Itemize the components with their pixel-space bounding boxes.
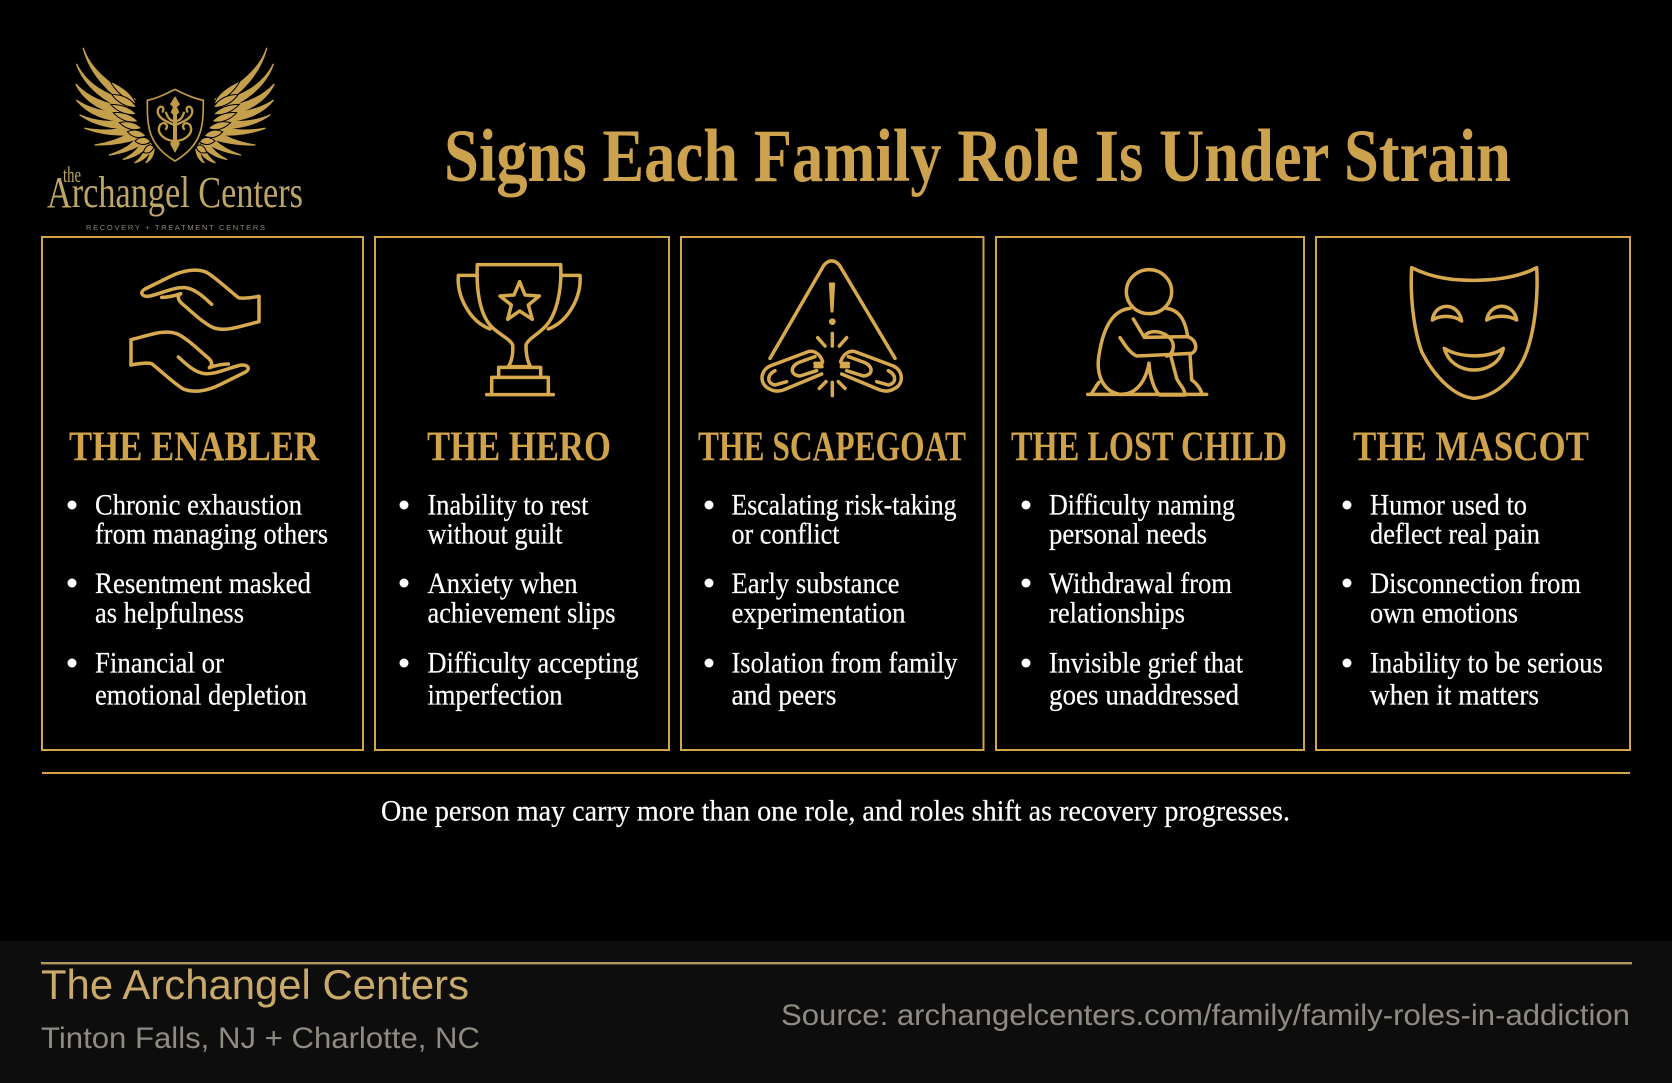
bullet list: as helpfulness [95, 598, 244, 630]
bullet list: experimentation [732, 598, 906, 630]
footer organisation name: The Archangel Centers [41, 961, 469, 1008]
bullet list: without guilt [428, 518, 563, 550]
logo wordmark: the [63, 162, 81, 187]
bullet list: own emotions [1370, 598, 1518, 630]
heading: THE HERO [427, 424, 611, 470]
bullet list: Difficulty naming [1049, 490, 1235, 522]
heading: THE MASCOT [1353, 424, 1589, 470]
bullet list: emotional depletion [95, 680, 307, 712]
bullet list: Financial or [95, 648, 224, 680]
logo: The Archangel Centers: Archangel Centers [47, 168, 303, 217]
icon: caring hands [131, 270, 259, 391]
bullet list [400, 490, 639, 712]
bullet list [1022, 490, 1244, 712]
icon: trophy [458, 265, 580, 395]
bullet list: Chronic exhaustion [95, 490, 302, 522]
bullet list: Difficulty accepting [428, 648, 639, 680]
heading: THE SCAPEGOAT [698, 424, 966, 470]
bullet list: relationships [1049, 598, 1185, 630]
heading: THE ENABLER [69, 424, 320, 470]
bullet list: Resentment masked [95, 568, 311, 600]
bullet list: Escalating risk-taking [732, 490, 957, 522]
bullet list [68, 490, 328, 712]
panel: The Scapegoat [681, 237, 984, 750]
bullet list [704, 490, 958, 712]
bullet list: Isolation from family [732, 648, 958, 680]
bullet list: and peers [732, 680, 836, 712]
bullet list: Invisible grief that [1049, 648, 1244, 680]
bullet list: from managing others [95, 518, 328, 550]
bullet list: Anxiety when [428, 568, 578, 600]
bullet list: Inability to rest [428, 490, 589, 522]
footer locations: Tinton Falls, NJ + Charlotte, NC [41, 1022, 480, 1055]
panel: The Mascot [1316, 237, 1630, 750]
logo emblem: winged shield [76, 48, 274, 163]
bullet list: or conflict [732, 518, 840, 550]
bullet list: deflect real pain [1370, 518, 1540, 550]
bullet list: personal needs [1049, 518, 1207, 550]
bullet list: when it matters [1370, 680, 1539, 712]
heading: THE LOST CHILD [1011, 424, 1287, 470]
logo: The Archangel Centers [47, 48, 303, 232]
bullet list: Withdrawal from [1049, 568, 1232, 600]
bullet list [1342, 490, 1603, 712]
bullet list: Humor used to [1370, 490, 1527, 522]
panel: The Hero [375, 237, 669, 750]
closing note: One person may carry more than one role, and roles shift as recovery progresses. [381, 796, 1290, 828]
logo tagline: RECOVERY + TREATMENT CENTERS [86, 223, 265, 232]
footer band [0, 941, 1672, 1083]
bullet list: Disconnection from [1370, 568, 1581, 600]
bullet list: Inability to be serious [1370, 648, 1603, 680]
bullet list: goes unaddressed [1049, 680, 1239, 712]
panel: The Lost Child [996, 237, 1304, 750]
footer source: Source: archangelcenters.com/family/family-roles-in-addiction [781, 999, 1630, 1032]
panel: The Enabler [42, 237, 363, 750]
icon: smiling theatre mask [1411, 268, 1537, 398]
bullet list: Early substance [732, 568, 900, 600]
icon: seated figure hugging knees [1088, 270, 1207, 395]
bullet list: imperfection [428, 680, 563, 712]
bullet list: achievement slips [428, 598, 616, 630]
icon: warning triangle with broken chain [762, 261, 901, 396]
